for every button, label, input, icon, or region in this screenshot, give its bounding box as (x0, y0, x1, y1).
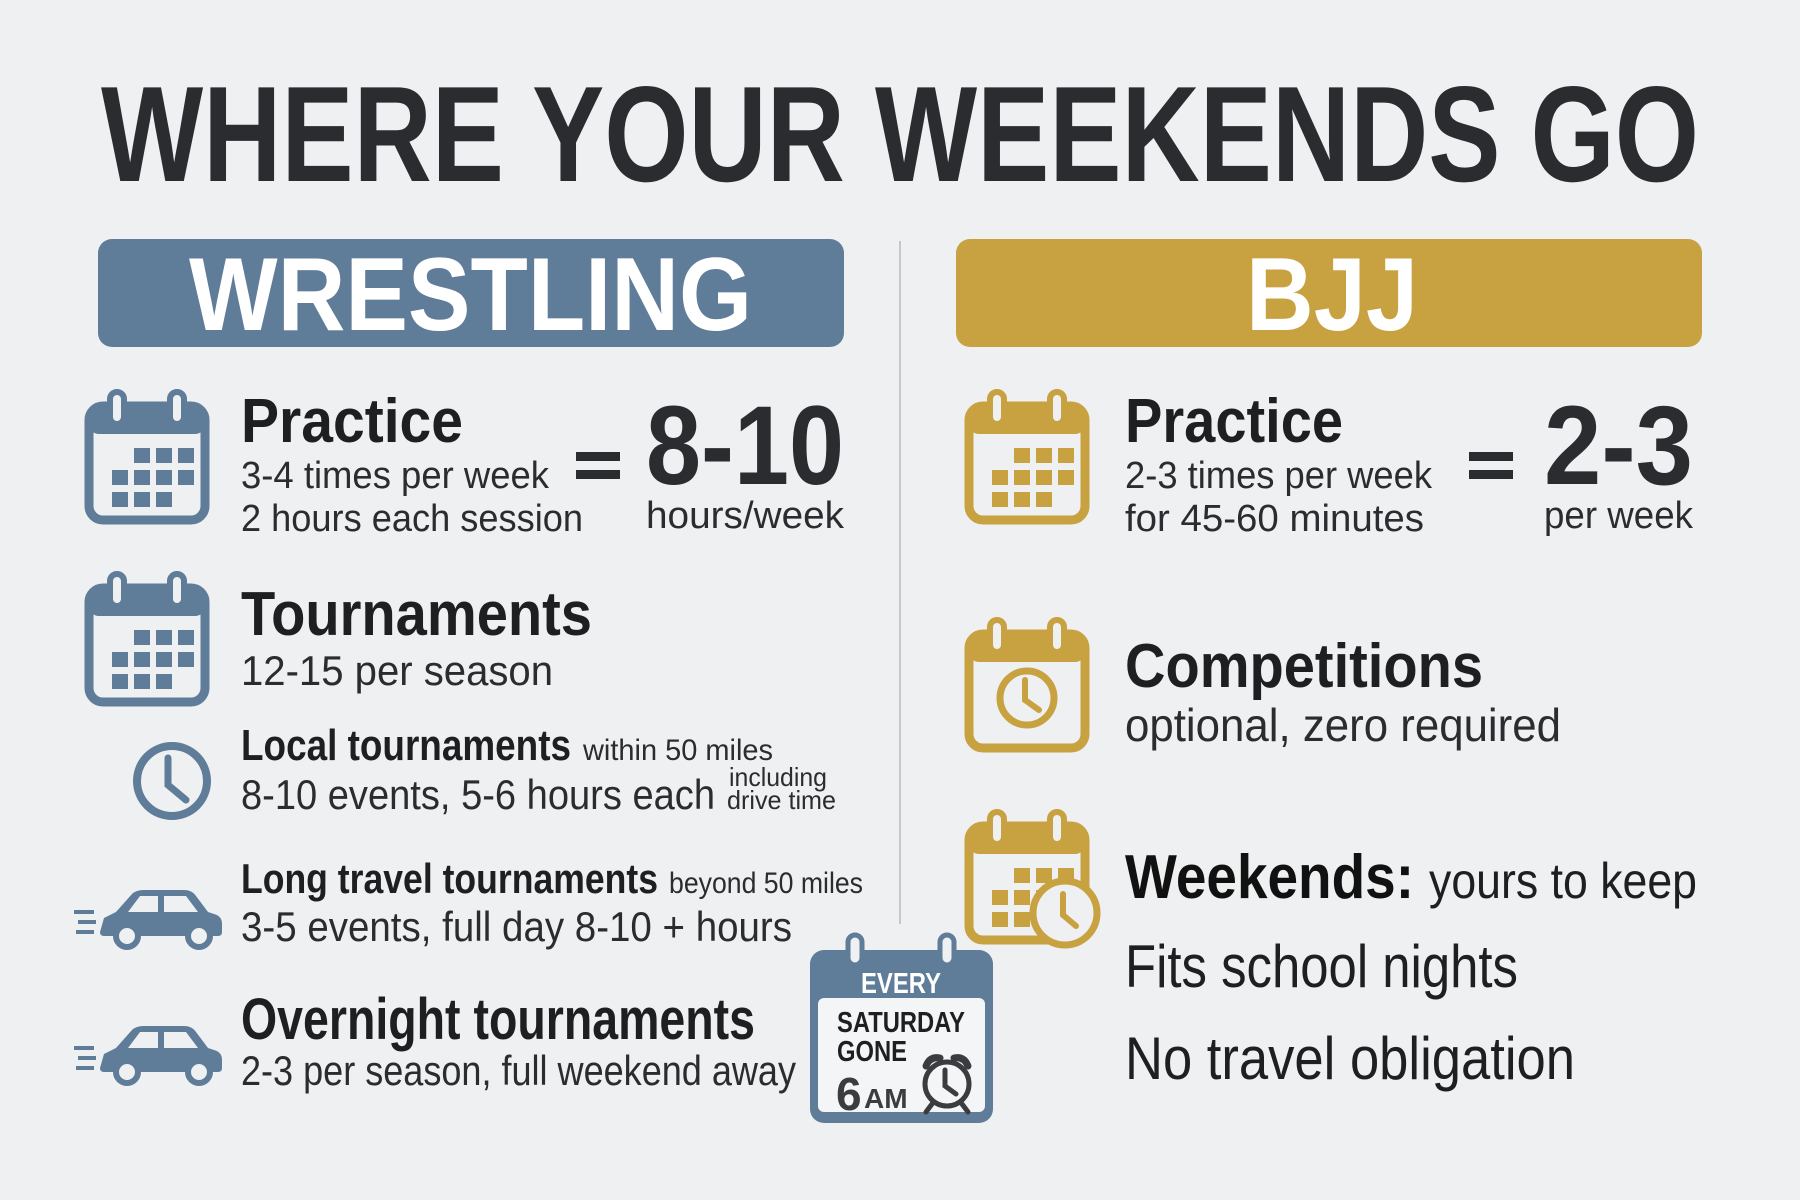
local tournaments: drive time (727, 785, 836, 815)
bjj competitions row: Competitions (1125, 632, 1483, 701)
callout: every saturday gone 6am: 6 (836, 1068, 862, 1120)
bjj weekends block: No travel obligation (1125, 1025, 1575, 1092)
callout: every saturday gone 6am (810, 935, 993, 1123)
wrestling practice row: 8-10 (646, 383, 844, 508)
wrestling practice row (89, 383, 845, 540)
wrestling practice row: Practice (241, 387, 463, 456)
callout: every saturday gone 6am: GONE (837, 1036, 907, 1068)
icon: calendar with clock (969, 620, 1085, 748)
icon: alarm clock (925, 1058, 969, 1112)
bjj practice row (969, 383, 1694, 540)
overnight tournaments: 2-3 per season, full weekend away (241, 1047, 796, 1094)
banner: bjj: BJJ (1246, 237, 1418, 353)
overnight tournaments: Overnight tournaments (241, 987, 755, 1052)
bjj practice row: per week (1544, 495, 1694, 537)
bjj weekends block: Weekends: (1125, 843, 1414, 912)
wrestling tournaments row: 12-15 per season (241, 647, 553, 694)
icon: calendar tournaments (89, 574, 205, 702)
bjj competitions row (969, 620, 1561, 751)
long travel tournaments: beyond 50 miles (669, 867, 863, 900)
icon: calendar wrestling practice (89, 392, 205, 520)
bjj weekends block (969, 812, 1697, 1092)
wrestling practice row: 2 hours each session (241, 498, 583, 540)
long travel tournaments (74, 855, 863, 950)
banner: bjj (956, 237, 1702, 353)
callout: every saturday gone 6am: EVERY (861, 968, 941, 1000)
bjj practice row: 2-3 times per week (1125, 455, 1433, 497)
wrestling practice row: 3-4 times per week (241, 455, 550, 497)
long travel tournaments: Long travel tournaments (241, 855, 658, 902)
local tournaments: including (729, 762, 827, 792)
icon: calendar bjj practice (969, 392, 1085, 520)
local tournaments: Local tournaments (241, 721, 571, 770)
bjj weekends block: yours to keep (1429, 853, 1697, 909)
local tournaments: 8-10 events, 5-6 hours each (241, 771, 715, 818)
banner: wrestling: WRESTLING (189, 237, 752, 353)
local tournaments (137, 721, 836, 818)
overnight tournaments (74, 987, 796, 1094)
bjj practice row: Practice (1125, 387, 1343, 456)
bjj practice row: for 45-60 minutes (1125, 498, 1424, 540)
icon: car overnight (74, 1026, 222, 1083)
bjj competitions row: optional, zero required (1125, 699, 1561, 751)
icon: clock (137, 746, 207, 816)
wrestling tournaments row: Tournaments (241, 580, 592, 649)
bjj practice row: 2-3 (1544, 383, 1693, 508)
wrestling practice row: hours/week (646, 495, 845, 537)
long travel tournaments: 3-5 events, full day 8-10 + hours (241, 903, 792, 950)
local tournaments: within 50 miles (582, 734, 773, 767)
wrestling tournaments row (89, 574, 592, 702)
callout: every saturday gone 6am: SATURDAY (837, 1007, 965, 1039)
icon: car (74, 890, 222, 947)
callout: every saturday gone 6am: AM (864, 1083, 908, 1114)
bjj weekends block: Fits school nights (1125, 933, 1518, 1000)
icon: calendar grid with clock (969, 812, 1097, 945)
